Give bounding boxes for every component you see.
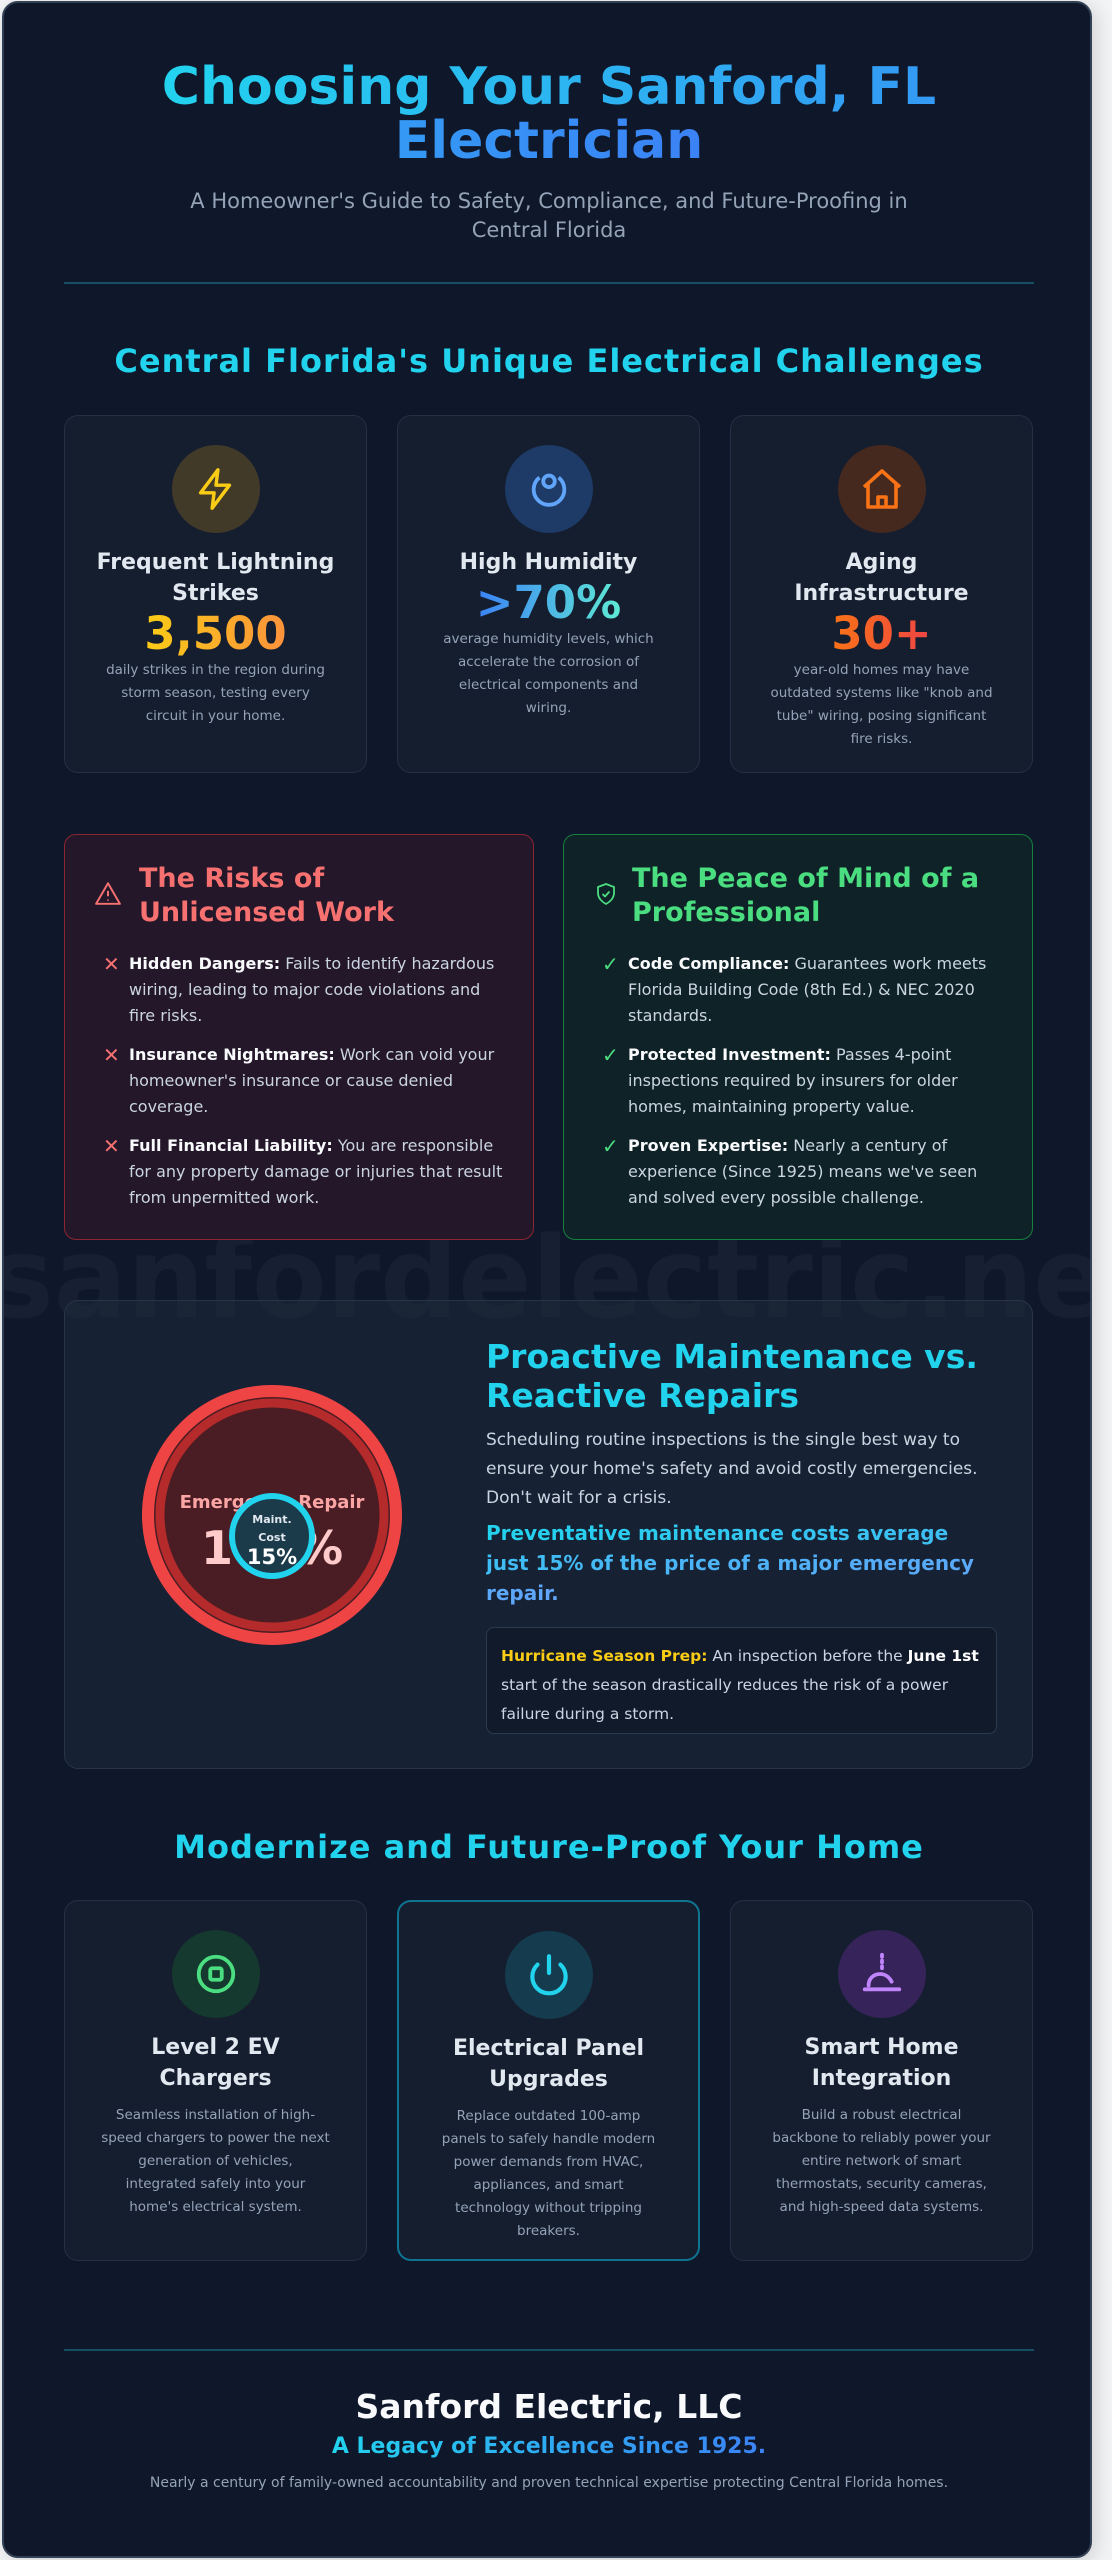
- donut chart: [142, 1385, 402, 1645]
- item: ✕: [103, 1134, 120, 1158]
- donut chart: Maint.: [252, 1513, 292, 1526]
- card: panel: [397, 1900, 700, 2261]
- icon: power: [504, 1931, 592, 2019]
- heading: [139, 863, 394, 928]
- card: humidity: High Humidity: [460, 550, 637, 575]
- icon: shield: [597, 883, 615, 905]
- heading: Proactive Maintenance vs. Reactive Repairs: [486, 1337, 978, 1415]
- icon: warning: [95, 882, 121, 905]
- donut chart: 100%: [201, 1521, 343, 1575]
- item: Hidden Dangers: Fails to identify hazardous wiring, leading to major code violations and fire risks.: [129, 954, 494, 1025]
- icon: humidity: [504, 445, 592, 533]
- card: lightning: 3,500: [144, 607, 287, 660]
- donut chart: 15%: [247, 1545, 297, 1569]
- card: EV: Level 2 EV Chargers: [151, 2035, 280, 2091]
- card: smart home: Smart Home Integration: [804, 2035, 958, 2091]
- heading: The Peace of Mind of a: [632, 863, 979, 894]
- icon: EV charger: [172, 1930, 260, 2018]
- donut chart: Emergency Repair: [180, 1492, 365, 1513]
- panel: risks: [64, 834, 534, 1240]
- card: smart home: [730, 1900, 1033, 2261]
- card: panel: Electrical Panel Upgrades: [453, 2036, 644, 2092]
- card: aging: year-old homes may have outdated systems like "knob and tube" wiring, posing significant fire risks.: [770, 662, 993, 747]
- heading: modernize: Modernize and Future-Proof Your Home: [174, 1828, 924, 1866]
- panel: maintenance: [64, 1300, 1033, 1769]
- subtitle: A Homeowner's Guide to Safety, Compliance, and Future-Proofing in Central Florida: [190, 189, 908, 242]
- card: humidity: average humidity levels, which accelerate the corrosion of electrical components and wiring.: [443, 631, 654, 716]
- callout: Hurricane Season Prep: An inspection before the June 1st start of the season drastically reduces the risk of a power failure during a storm.: [501, 1647, 979, 1723]
- highlight: Preventative maintenance costs average just 15% of the price of a major emergency repair.: [486, 1521, 974, 1605]
- heading: [632, 863, 979, 928]
- panel: professional: [563, 834, 1033, 1240]
- paragraph: Scheduling routine inspections is the single best way to ensure your home's safety and avoid costly emergencies. Don't wait for a crisis.: [486, 1430, 978, 1508]
- card: lightning: Frequent Lightning Strikes: [97, 550, 334, 606]
- title: Electrician: [395, 111, 703, 171]
- footer: A Legacy of Excellence Since 1925.: [332, 2434, 766, 2459]
- card: lightning: daily strikes in the region during storm season, testing every circuit in your home.: [106, 662, 325, 724]
- title: [162, 57, 936, 171]
- icon: house: [838, 445, 926, 533]
- card: smart home: Build a robust electrical backbone to reliably power your entire network of smart thermostats, security cameras, and high-speed data systems.: [772, 2107, 991, 2215]
- footer: [150, 2387, 948, 2491]
- footer: Nearly a century of family-owned accountability and proven technical expertise protecting Central Florida homes.: [150, 2475, 948, 2491]
- item: Code Compliance: Guarantees work meets Florida Building Code (8th Ed.) & NEC 2020 standards.: [628, 954, 986, 1025]
- item: Full Financial Liability: You are responsible for any property damage or injuries that result from unpermitted work.: [129, 1136, 502, 1207]
- title: Choosing Your Sanford, FL: [162, 57, 936, 117]
- heading: The Risks of: [139, 863, 324, 894]
- footer: Sanford Electric, LLC: [356, 2387, 742, 2426]
- item: ✓: [602, 1134, 619, 1158]
- item: ✓: [602, 952, 619, 976]
- icon: smart home: [838, 1930, 926, 2018]
- card: lightning: [64, 415, 367, 773]
- item: Proven Expertise: Nearly a century of experience (Since 1925) means we've seen and solved every possible challenge.: [628, 1136, 977, 1207]
- card: humidity: >70%: [476, 576, 621, 629]
- item: Protected Investment: Passes 4-point inspections required by insurers for older homes, maintaining property value.: [628, 1045, 958, 1116]
- card: EV: Seamless installation of high-speed chargers to power the next generation of vehicles, integrated safely into your home's electrical system.: [101, 2107, 330, 2215]
- heading: challenges: Central Florida's Unique Electrical Challenges: [114, 342, 984, 380]
- heading: Unlicensed Work: [139, 897, 394, 928]
- card: aging: 30+: [831, 607, 932, 660]
- item: Insurance Nightmares: Work can void your homeowner's insurance or cause denied coverage.: [129, 1045, 494, 1116]
- card: EV: [64, 1900, 367, 2261]
- card: panel: Replace outdated 100-amp panels to safely handle modern power demands from HVAC, appliances, and smart technology without tripping breakers.: [442, 2108, 655, 2239]
- heading: Professional: [632, 897, 820, 928]
- item: ✓: [602, 1043, 619, 1067]
- item: ✕: [103, 1043, 120, 1067]
- card: aging: [730, 415, 1033, 773]
- card: aging: Aging Infrastructure: [794, 550, 969, 606]
- callout: [486, 1627, 997, 1734]
- icon: lightning: [172, 445, 260, 533]
- donut chart: Cost: [258, 1531, 286, 1544]
- item: ✕: [103, 952, 120, 976]
- card: humidity: [397, 415, 700, 773]
